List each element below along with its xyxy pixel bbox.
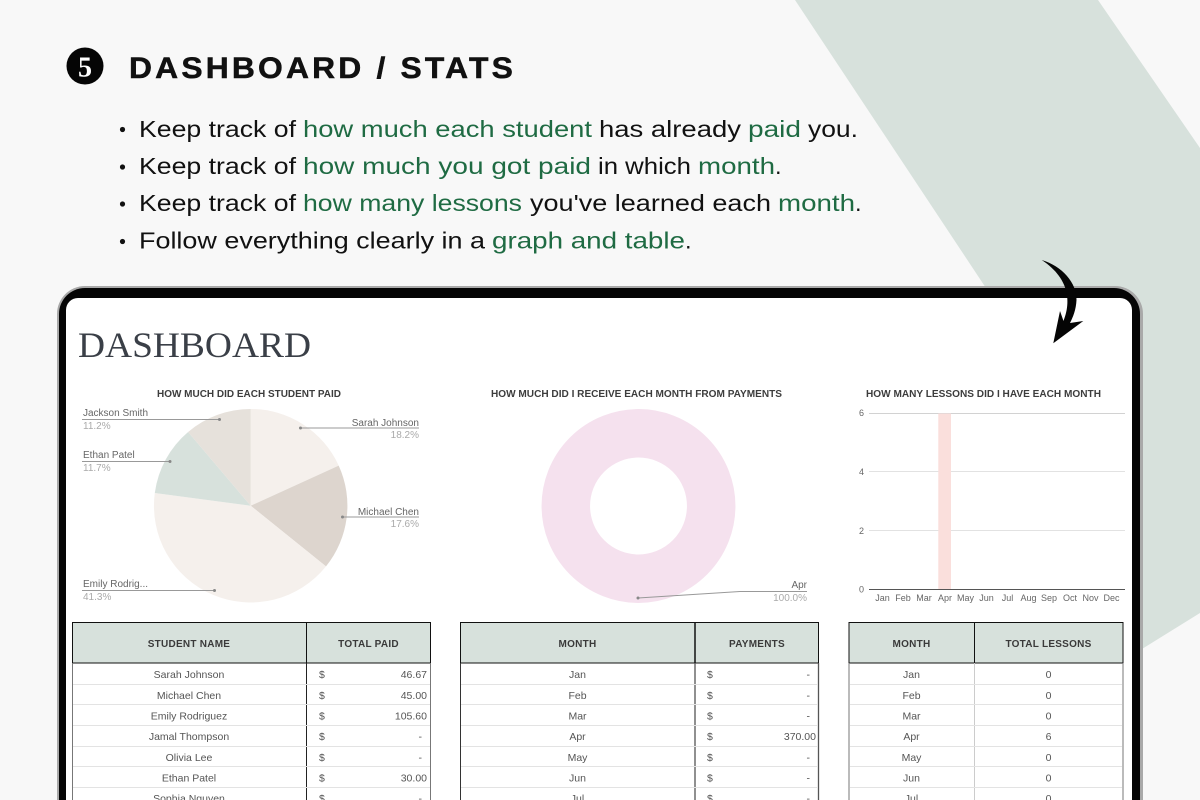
bullet: monthly payments: Keep track of bbox=[139, 153, 297, 179]
row: Mar: 0 bbox=[1046, 710, 1052, 722]
x axis labels: Jul bbox=[1002, 593, 1013, 603]
pie label: Michael Chen: Michael Chen bbox=[358, 507, 419, 518]
table header: PAYMENTS bbox=[729, 639, 785, 650]
bullet: monthly lessons: how many lessons bbox=[303, 190, 522, 216]
icon: number 5 badge bbox=[66, 48, 104, 84]
row: Mar: $ bbox=[707, 710, 713, 722]
row: Michael Chen: Michael Chen bbox=[157, 690, 221, 702]
pie label: Sarah Johnson: 18.2% bbox=[391, 430, 419, 441]
row: Ethan Patel: Ethan Patel bbox=[162, 772, 216, 784]
bullet: student payments: you. bbox=[808, 116, 858, 142]
row: Feb: $ bbox=[707, 690, 713, 702]
row: Jamal Thompson: $ bbox=[319, 731, 325, 743]
bullet: graph and table bbox=[120, 228, 692, 254]
row: Feb: Feb bbox=[902, 690, 921, 702]
row: Mar: Mar bbox=[902, 710, 921, 722]
pie chart: student payments bbox=[154, 409, 347, 602]
pie label: Ethan Patel: Ethan Patel bbox=[83, 450, 135, 461]
slice: Jackson Smith bbox=[188, 409, 251, 506]
donut chart: monthly payments bbox=[566, 433, 711, 579]
row: Jan: $ bbox=[707, 669, 713, 681]
row: Jul bbox=[571, 793, 810, 800]
row: Michael Chen: $ bbox=[319, 690, 325, 702]
row: Jun: $ bbox=[707, 772, 713, 784]
bullet: student payments: paid bbox=[748, 116, 801, 142]
slice: Michael Chen bbox=[251, 466, 347, 566]
row: Mar: Mar bbox=[568, 710, 587, 722]
row: Jul bbox=[905, 793, 1052, 800]
table header bbox=[72, 622, 430, 663]
row: Jun: - bbox=[806, 772, 810, 784]
row: Mar: - bbox=[806, 710, 810, 722]
x axis labels: Mar bbox=[916, 593, 932, 603]
row: Jan: Jan bbox=[903, 669, 920, 681]
pie label: Emily Rodriguez bbox=[82, 579, 216, 603]
tablet frame bbox=[57, 286, 1143, 800]
row: May bbox=[902, 752, 1052, 764]
x axis labels: May bbox=[957, 593, 974, 603]
pie label: Emily Rodriguez: 41.3% bbox=[83, 592, 111, 603]
table header bbox=[849, 622, 1123, 663]
bar chart: monthly lessons bbox=[859, 408, 1125, 603]
row: Emily Rodriguez bbox=[151, 710, 427, 722]
pie label: Jackson Smith bbox=[82, 408, 221, 432]
x axis labels bbox=[875, 593, 1120, 603]
row: Feb: 0 bbox=[1046, 690, 1052, 702]
bullet: monthly lessons: you've learned each bbox=[530, 190, 771, 216]
row: Feb bbox=[902, 690, 1052, 702]
dashboard title: DASHBOARD bbox=[78, 325, 311, 365]
x axis labels: Apr bbox=[938, 593, 952, 603]
bullet: monthly payments: month bbox=[698, 153, 775, 179]
row: Apr: Apr bbox=[569, 731, 586, 743]
row: May: May bbox=[902, 752, 922, 764]
row: Feb: - bbox=[806, 690, 810, 702]
bullet: monthly payments: in which bbox=[598, 153, 691, 179]
row: Feb: Feb bbox=[568, 690, 587, 702]
row: Mar bbox=[902, 710, 1052, 722]
bullet: monthly lessons bbox=[120, 190, 862, 216]
bullet: monthly lessons: Keep track of bbox=[139, 190, 297, 216]
bullet: monthly payments: how much you got paid bbox=[303, 153, 591, 179]
row: Mar bbox=[568, 710, 810, 722]
bar: Apr bbox=[938, 414, 951, 589]
row: Ethan Patel: 30.00 bbox=[401, 772, 427, 784]
row: Emily Rodriguez: $ bbox=[319, 710, 325, 722]
row: Sarah Johnson: $ bbox=[319, 669, 325, 681]
bullet: student payments: Keep track of bbox=[139, 116, 297, 142]
bullet: graph and table: Follow everything clearly in a bbox=[139, 228, 486, 254]
row: Jan bbox=[569, 669, 810, 681]
y axis labels bbox=[859, 408, 864, 594]
row: Apr: 370.00 bbox=[784, 731, 816, 743]
table header: MONTH bbox=[893, 639, 930, 650]
table header: TOTAL LESSONS bbox=[1005, 639, 1092, 650]
donut label: Apr: Apr bbox=[791, 580, 808, 591]
chart title: monthly payments: HOW MUCH DID I RECEIVE EACH MONTH FROM PAYMENTS bbox=[491, 388, 782, 400]
pie label: Jackson Smith: 11.2% bbox=[83, 421, 111, 432]
row: Sarah Johnson bbox=[154, 669, 427, 681]
x axis labels: Feb bbox=[895, 593, 911, 603]
bullet: student payments bbox=[120, 116, 858, 142]
row: Olivia Lee: Olivia Lee bbox=[166, 752, 212, 764]
row: Michael Chen: 45.00 bbox=[401, 690, 427, 702]
table header: STUDENT NAME bbox=[148, 639, 230, 650]
x axis labels: Aug bbox=[1020, 593, 1037, 603]
row: May: $ bbox=[707, 752, 713, 764]
table: student payments bbox=[72, 622, 430, 800]
x axis labels: Jun bbox=[979, 593, 994, 603]
row: Sarah Johnson: Sarah Johnson bbox=[154, 669, 224, 681]
pie label: Ethan Patel: 11.7% bbox=[83, 463, 111, 474]
row: Jun: Jun bbox=[569, 772, 586, 784]
bullet: student payments: how much each student bbox=[303, 116, 593, 142]
bullet: student payments: has already bbox=[599, 116, 741, 142]
row: Apr bbox=[903, 731, 1052, 743]
row: Jun bbox=[903, 772, 1052, 784]
arrow bbox=[1042, 260, 1083, 343]
pie label: Sarah Johnson bbox=[299, 418, 419, 441]
row: Emily Rodriguez: 105.60 bbox=[395, 710, 427, 722]
chart title: monthly lessons: HOW MANY LESSONS DID I HAVE EACH MONTH bbox=[866, 388, 1101, 400]
y axis labels: 0 bbox=[859, 584, 864, 594]
row: Jan: Jan bbox=[569, 669, 586, 681]
pie label: Emily Rodriguez: Emily Rodrig... bbox=[83, 579, 148, 590]
table: monthly payments bbox=[460, 622, 818, 800]
bullet list bbox=[120, 116, 862, 254]
background sage diagonal band bbox=[795, 0, 1200, 675]
row: Jamal Thompson bbox=[149, 731, 422, 743]
row: Jan: 0 bbox=[1046, 669, 1052, 681]
pie label: Sarah Johnson: Sarah Johnson bbox=[352, 418, 419, 429]
row: May: - bbox=[806, 752, 810, 764]
bullet: monthly lessons: . bbox=[855, 190, 862, 216]
row: Olivia Lee: $ bbox=[319, 752, 325, 764]
pie label: Jackson Smith: Jackson Smith bbox=[83, 408, 148, 419]
table header: MONTH bbox=[559, 639, 596, 650]
table header bbox=[460, 622, 818, 663]
donut label: Apr: 100.0% bbox=[773, 593, 807, 604]
x axis labels: Oct bbox=[1063, 593, 1077, 603]
icon: number 5 badge: 5 bbox=[78, 52, 92, 84]
slice: Ethan Patel bbox=[155, 432, 251, 506]
row: Apr: $ bbox=[707, 731, 713, 743]
row: Jamal Thompson: - bbox=[418, 731, 422, 743]
row: Sarah Johnson: 46.67 bbox=[401, 669, 427, 681]
donut label: Apr bbox=[636, 580, 808, 604]
row: Feb bbox=[568, 690, 810, 702]
slice: Sarah Johnson bbox=[251, 409, 339, 506]
row: Jan: - bbox=[806, 669, 810, 681]
heading: DASHBOARD / STATS bbox=[129, 52, 516, 85]
row: Ethan Patel: $ bbox=[319, 772, 325, 784]
row: May bbox=[568, 752, 810, 764]
row: Olivia Lee: - bbox=[418, 752, 422, 764]
pie label: Ethan Patel bbox=[82, 450, 172, 474]
bullet: monthly payments bbox=[120, 153, 782, 179]
row: Jun: 0 bbox=[1046, 772, 1052, 784]
row: Jun: Jun bbox=[903, 772, 920, 784]
y axis labels: 4 bbox=[859, 467, 864, 477]
row: Emily Rodriguez: Emily Rodriguez bbox=[151, 710, 227, 722]
row: Sophia Nguyen bbox=[153, 793, 422, 800]
chart title: student payments: HOW MUCH DID EACH STUDENT PAID bbox=[157, 388, 341, 400]
row: May: 0 bbox=[1046, 752, 1052, 764]
row: Olivia Lee bbox=[166, 752, 422, 764]
x axis labels: Sep bbox=[1041, 593, 1057, 603]
x axis labels: Dec bbox=[1103, 593, 1120, 603]
row: Apr: 6 bbox=[1046, 731, 1052, 743]
pie label: Michael Chen: 17.6% bbox=[391, 519, 419, 530]
bullet: graph and table: graph and table bbox=[492, 228, 685, 254]
row: Apr: Apr bbox=[903, 731, 920, 743]
pie label: Michael Chen bbox=[341, 507, 419, 530]
bullet: graph and table: . bbox=[685, 228, 692, 254]
bullet: monthly payments: . bbox=[775, 153, 782, 179]
x axis labels: Jan bbox=[875, 593, 890, 603]
bullet: monthly lessons: month bbox=[778, 190, 855, 216]
row: Jun bbox=[569, 772, 810, 784]
table: monthly lessons bbox=[849, 622, 1123, 800]
row: Jan bbox=[903, 669, 1052, 681]
row: Jamal Thompson: Jamal Thompson bbox=[149, 731, 229, 743]
table header: TOTAL PAID bbox=[338, 639, 399, 650]
slice: Emily Rodriguez bbox=[154, 493, 326, 602]
row: Ethan Patel bbox=[162, 772, 427, 784]
x axis labels: Nov bbox=[1082, 593, 1099, 603]
y axis labels: 2 bbox=[859, 526, 864, 536]
y axis labels: 6 bbox=[859, 408, 864, 418]
row: Michael Chen bbox=[157, 690, 427, 702]
row: Apr bbox=[569, 731, 816, 743]
row: May: May bbox=[568, 752, 588, 764]
